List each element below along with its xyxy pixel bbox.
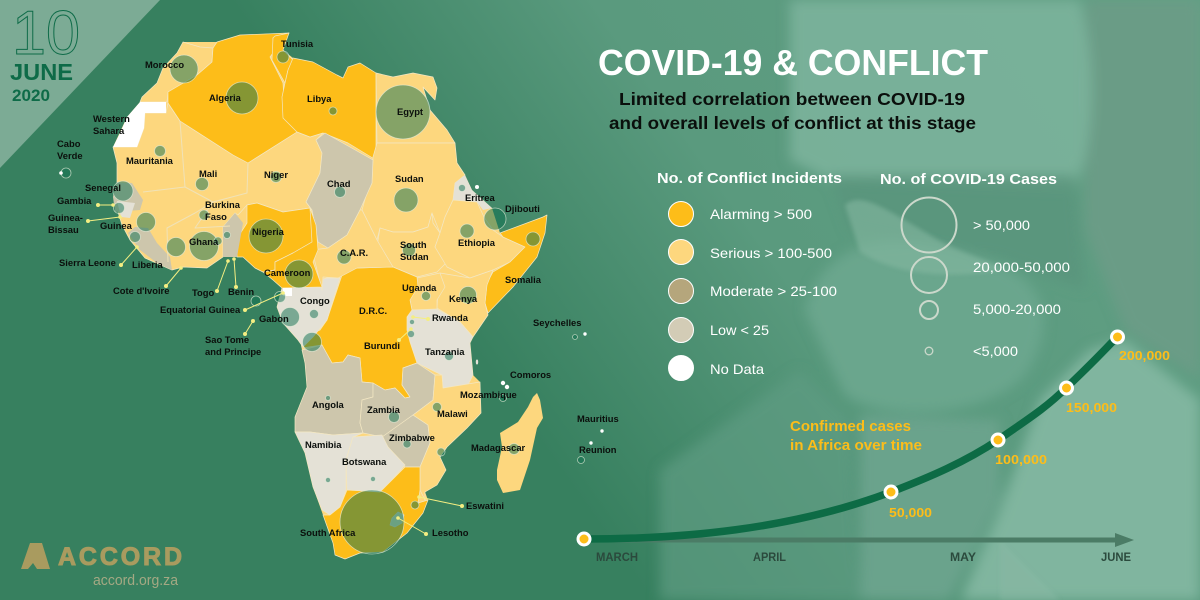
curve caption: in Africa over time [790, 437, 922, 454]
country labels: Mauritius [577, 413, 619, 424]
country labels: Verde [57, 150, 83, 161]
Namibia [295, 432, 363, 515]
legend: conflict incidents [657, 170, 842, 380]
country labels: Ghana [189, 236, 219, 247]
country labels: D.R.C. [359, 305, 387, 316]
month axis labels [596, 550, 1131, 564]
country labels: Eritrea [465, 192, 495, 203]
Chad [306, 133, 373, 248]
country labels: Sudan [400, 251, 429, 262]
country labels: Liberia [132, 259, 164, 270]
country labels: Gabon [259, 313, 289, 324]
curve data points [578, 331, 1124, 545]
Eritrea [453, 175, 492, 210]
legend: conflict incidents: Serious > 100-500 [710, 245, 832, 261]
Internal borders [143, 121, 248, 262]
Nigeria [237, 203, 313, 272]
date month: JUNE [10, 59, 73, 85]
cases growth curve [584, 337, 1117, 539]
timeline arrow [600, 533, 1134, 547]
legend heading: No. of Conflict Incidents [657, 170, 842, 187]
Uganda [410, 273, 445, 310]
country labels [48, 38, 619, 538]
legend: COVID-19 cases: > 50,000 [973, 217, 1030, 233]
country labels: C.A.R. [340, 247, 368, 258]
country labels: Libya [307, 93, 332, 104]
Congo and Gabon [277, 278, 340, 347]
country labels: Gambia [57, 195, 92, 206]
Libya [282, 58, 376, 160]
Algeria [168, 33, 297, 163]
country labels: Cote d'Ivoire [113, 285, 169, 296]
country labels: Madagascar [471, 442, 526, 453]
curve value labels [889, 348, 1170, 520]
Guinea-Bissau patch [117, 201, 135, 218]
Sudan [362, 143, 465, 240]
legend: COVID-19 cases: 20,000-50,000 [973, 259, 1070, 275]
country labels: Angola [312, 399, 345, 410]
legend: COVID-19 cases [880, 171, 1070, 359]
country labels: Senegal [85, 182, 121, 193]
Mozambique and Malawi [413, 375, 481, 500]
country labels: Western [93, 113, 130, 124]
country labels: Egypt [397, 106, 423, 117]
Madagascar [497, 393, 543, 493]
country labels: Sao Tome [205, 334, 249, 345]
country labels: Burundi [364, 340, 400, 351]
Togo and Benin [223, 213, 243, 257]
country labels: Nigeria [252, 226, 285, 237]
Tanzania and Rwanda Burundi [407, 309, 473, 388]
Equatorial Guinea box [283, 288, 292, 296]
curve caption: Confirmed cases [790, 418, 911, 435]
country labels: Benin [228, 286, 254, 297]
Lesotho [390, 512, 404, 527]
country labels: Togo [192, 287, 214, 298]
month axis labels: JUNE [1101, 550, 1131, 564]
Tunisia [272, 33, 293, 83]
legend: conflict incidents: Low < 25 [710, 322, 769, 338]
country labels: Cameroon [264, 267, 311, 278]
country labels: Mauritania [126, 155, 174, 166]
country labels: Algeria [209, 92, 242, 103]
country labels: Equatorial Guinea [160, 304, 241, 315]
country labels: Comoros [510, 369, 551, 380]
C.A.R. [312, 210, 393, 290]
legend: conflict incidents: No Data [710, 361, 764, 377]
country labels: Rwanda [432, 312, 469, 323]
subtitle [609, 89, 976, 133]
country labels: Tanzania [425, 346, 465, 357]
country labels: Congo [300, 295, 330, 306]
legend: conflict incidents: Moderate > 25-100 [710, 283, 837, 299]
Kenya [437, 270, 493, 337]
Zambia [360, 363, 435, 437]
subtitle: Limited correlation between COVID-19 [619, 89, 965, 109]
country labels: Sudan [395, 173, 424, 184]
D.R.C. [300, 267, 418, 398]
Angola [295, 345, 373, 435]
subtitle: and overall levels of conflict at this stage [609, 113, 976, 133]
Cameroon [263, 208, 322, 288]
country labels: Sahara [93, 125, 125, 136]
country labels: Somalia [505, 274, 542, 285]
title: COVID-19 & CONFLICT [598, 42, 988, 83]
curve value labels: 150,000 [1066, 400, 1117, 415]
continent silhouette [113, 33, 547, 559]
country labels: South Africa [300, 527, 356, 538]
leader lines for small countries [86, 203, 464, 536]
country labels: Zimbabwe [389, 432, 435, 443]
country labels: and Principe [205, 346, 261, 357]
Western Sahara [113, 102, 166, 147]
country labels: Kenya [449, 293, 478, 304]
country labels: Ethiopia [458, 237, 496, 248]
date day: 10 [12, 0, 80, 68]
date corner panel [0, 0, 160, 168]
South Africa [323, 467, 428, 559]
Egypt [376, 73, 455, 143]
month axis labels: MAY [950, 550, 976, 564]
country labels: Cabo [57, 138, 81, 149]
month axis labels: MARCH [596, 550, 638, 564]
small islands [59, 171, 604, 445]
country labels: Malawi [437, 408, 468, 419]
country labels: Djibouti [505, 203, 540, 214]
legend: COVID-19 cases: 5,000-20,000 [973, 301, 1061, 317]
logo wordmark: ACCORD [58, 543, 182, 571]
Somalia [485, 215, 547, 313]
country labels: Mali [199, 168, 217, 179]
Morocco [140, 42, 213, 102]
country labels: Sierra Leone [59, 257, 116, 268]
country labels: Chad [327, 178, 351, 189]
curve value labels: 100,000 [995, 452, 1047, 467]
curve caption [790, 418, 922, 454]
South Sudan [377, 213, 447, 277]
country labels: South [400, 239, 427, 250]
Zimbabwe [382, 415, 430, 467]
country labels: Guinea [100, 220, 133, 231]
ACCORD logo [21, 543, 182, 589]
West Africa serious-level countries [113, 103, 323, 270]
curve value labels: 50,000 [889, 505, 932, 520]
country labels: Faso [205, 211, 227, 222]
country labels: Mozambique [460, 389, 517, 400]
month axis labels: APRIL [753, 550, 786, 564]
Sierra Leone and Liberia [128, 227, 172, 270]
legend: COVID-19 cases: <5,000 [973, 343, 1018, 359]
logo mark [21, 543, 50, 569]
curve value labels: 200,000 [1119, 348, 1170, 363]
country labels: Zambia [367, 404, 401, 415]
country labels: Guinea- [48, 212, 83, 223]
country labels: Uganda [402, 282, 437, 293]
country labels: Lesotho [432, 527, 469, 538]
Botswana [346, 435, 405, 492]
country labels: Botswana [342, 456, 387, 467]
country labels: Seychelles [533, 317, 581, 328]
date year: 2020 [12, 87, 50, 105]
country labels: Bissau [48, 224, 79, 235]
country labels: Namibia [305, 439, 342, 450]
country labels: Eswatini [466, 500, 504, 511]
legend heading: No. of COVID-19 Cases [880, 171, 1057, 188]
legend: conflict incidents: Alarming > 500 [710, 206, 812, 222]
country labels: Morocco [145, 59, 184, 70]
logo url: accord.org.za [93, 573, 179, 589]
country labels: Reunion [579, 444, 617, 455]
map of Africa [113, 33, 547, 559]
country labels: Tunisia [281, 38, 314, 49]
Senegal Gambia [113, 182, 143, 212]
country labels: Niger [264, 169, 288, 180]
Ethiopia [435, 200, 525, 278]
country labels: Burkina [205, 199, 241, 210]
COVID-19 case bubbles [61, 51, 584, 554]
